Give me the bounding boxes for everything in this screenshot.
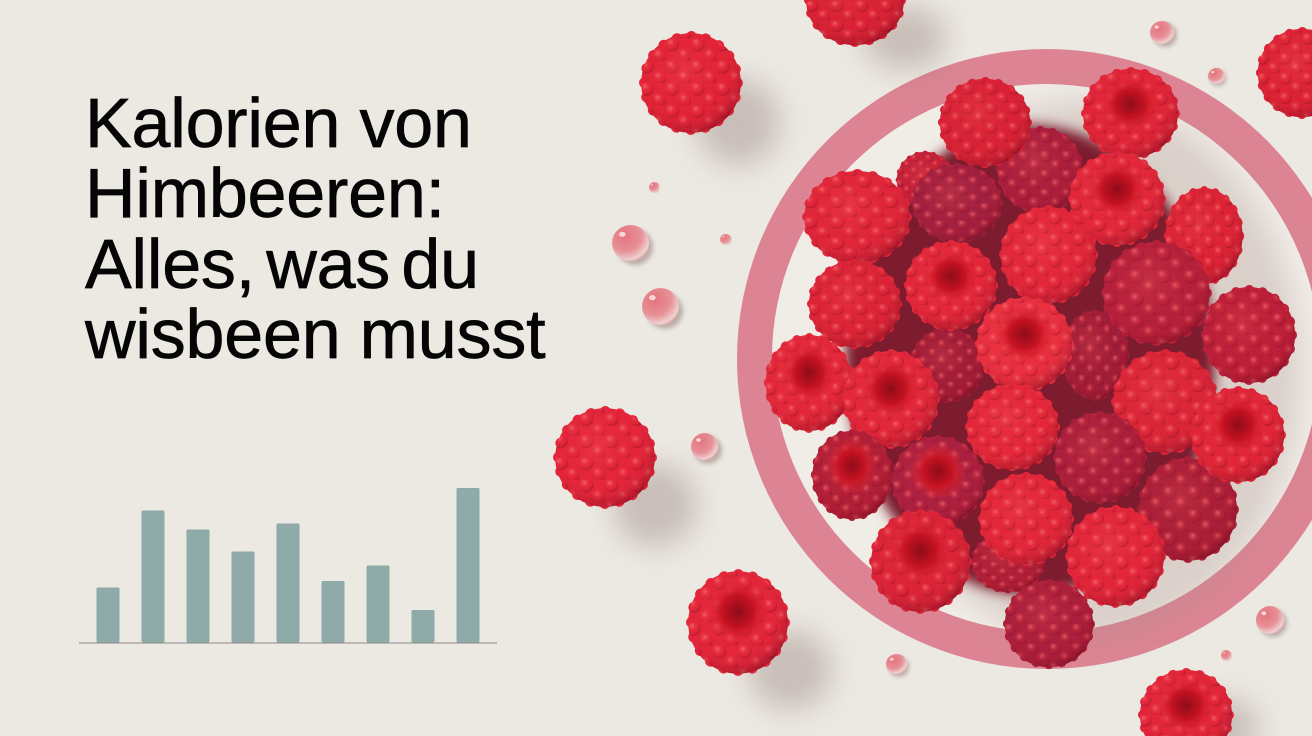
loose raspberry top right bbox=[1258, 29, 1312, 117]
title bbox=[84, 84, 546, 373]
loose raspberry bottom left bbox=[688, 571, 788, 674]
title: Himbeeren: bbox=[85, 154, 445, 232]
loose raspberry top bbox=[806, 0, 904, 45]
circular plate bbox=[737, 49, 1312, 669]
bar chart bbox=[79, 488, 497, 643]
loose raspberry left bbox=[555, 408, 655, 507]
berries, back layer bbox=[897, 128, 1295, 667]
title: Kalorien von bbox=[85, 84, 472, 162]
soft shadows of loose raspberries bbox=[613, 6, 1259, 736]
loose raspberry bottom right bbox=[1140, 670, 1232, 736]
berries, front layer bbox=[766, 242, 1284, 612]
raspberries on the plate bbox=[766, 69, 1295, 667]
title: Alles, was du bbox=[85, 224, 479, 302]
title: wisbeen musst bbox=[85, 295, 545, 373]
loose raspberry top left bbox=[641, 33, 741, 133]
berries, middle layer bbox=[804, 69, 1210, 347]
water droplets bbox=[612, 21, 1287, 677]
